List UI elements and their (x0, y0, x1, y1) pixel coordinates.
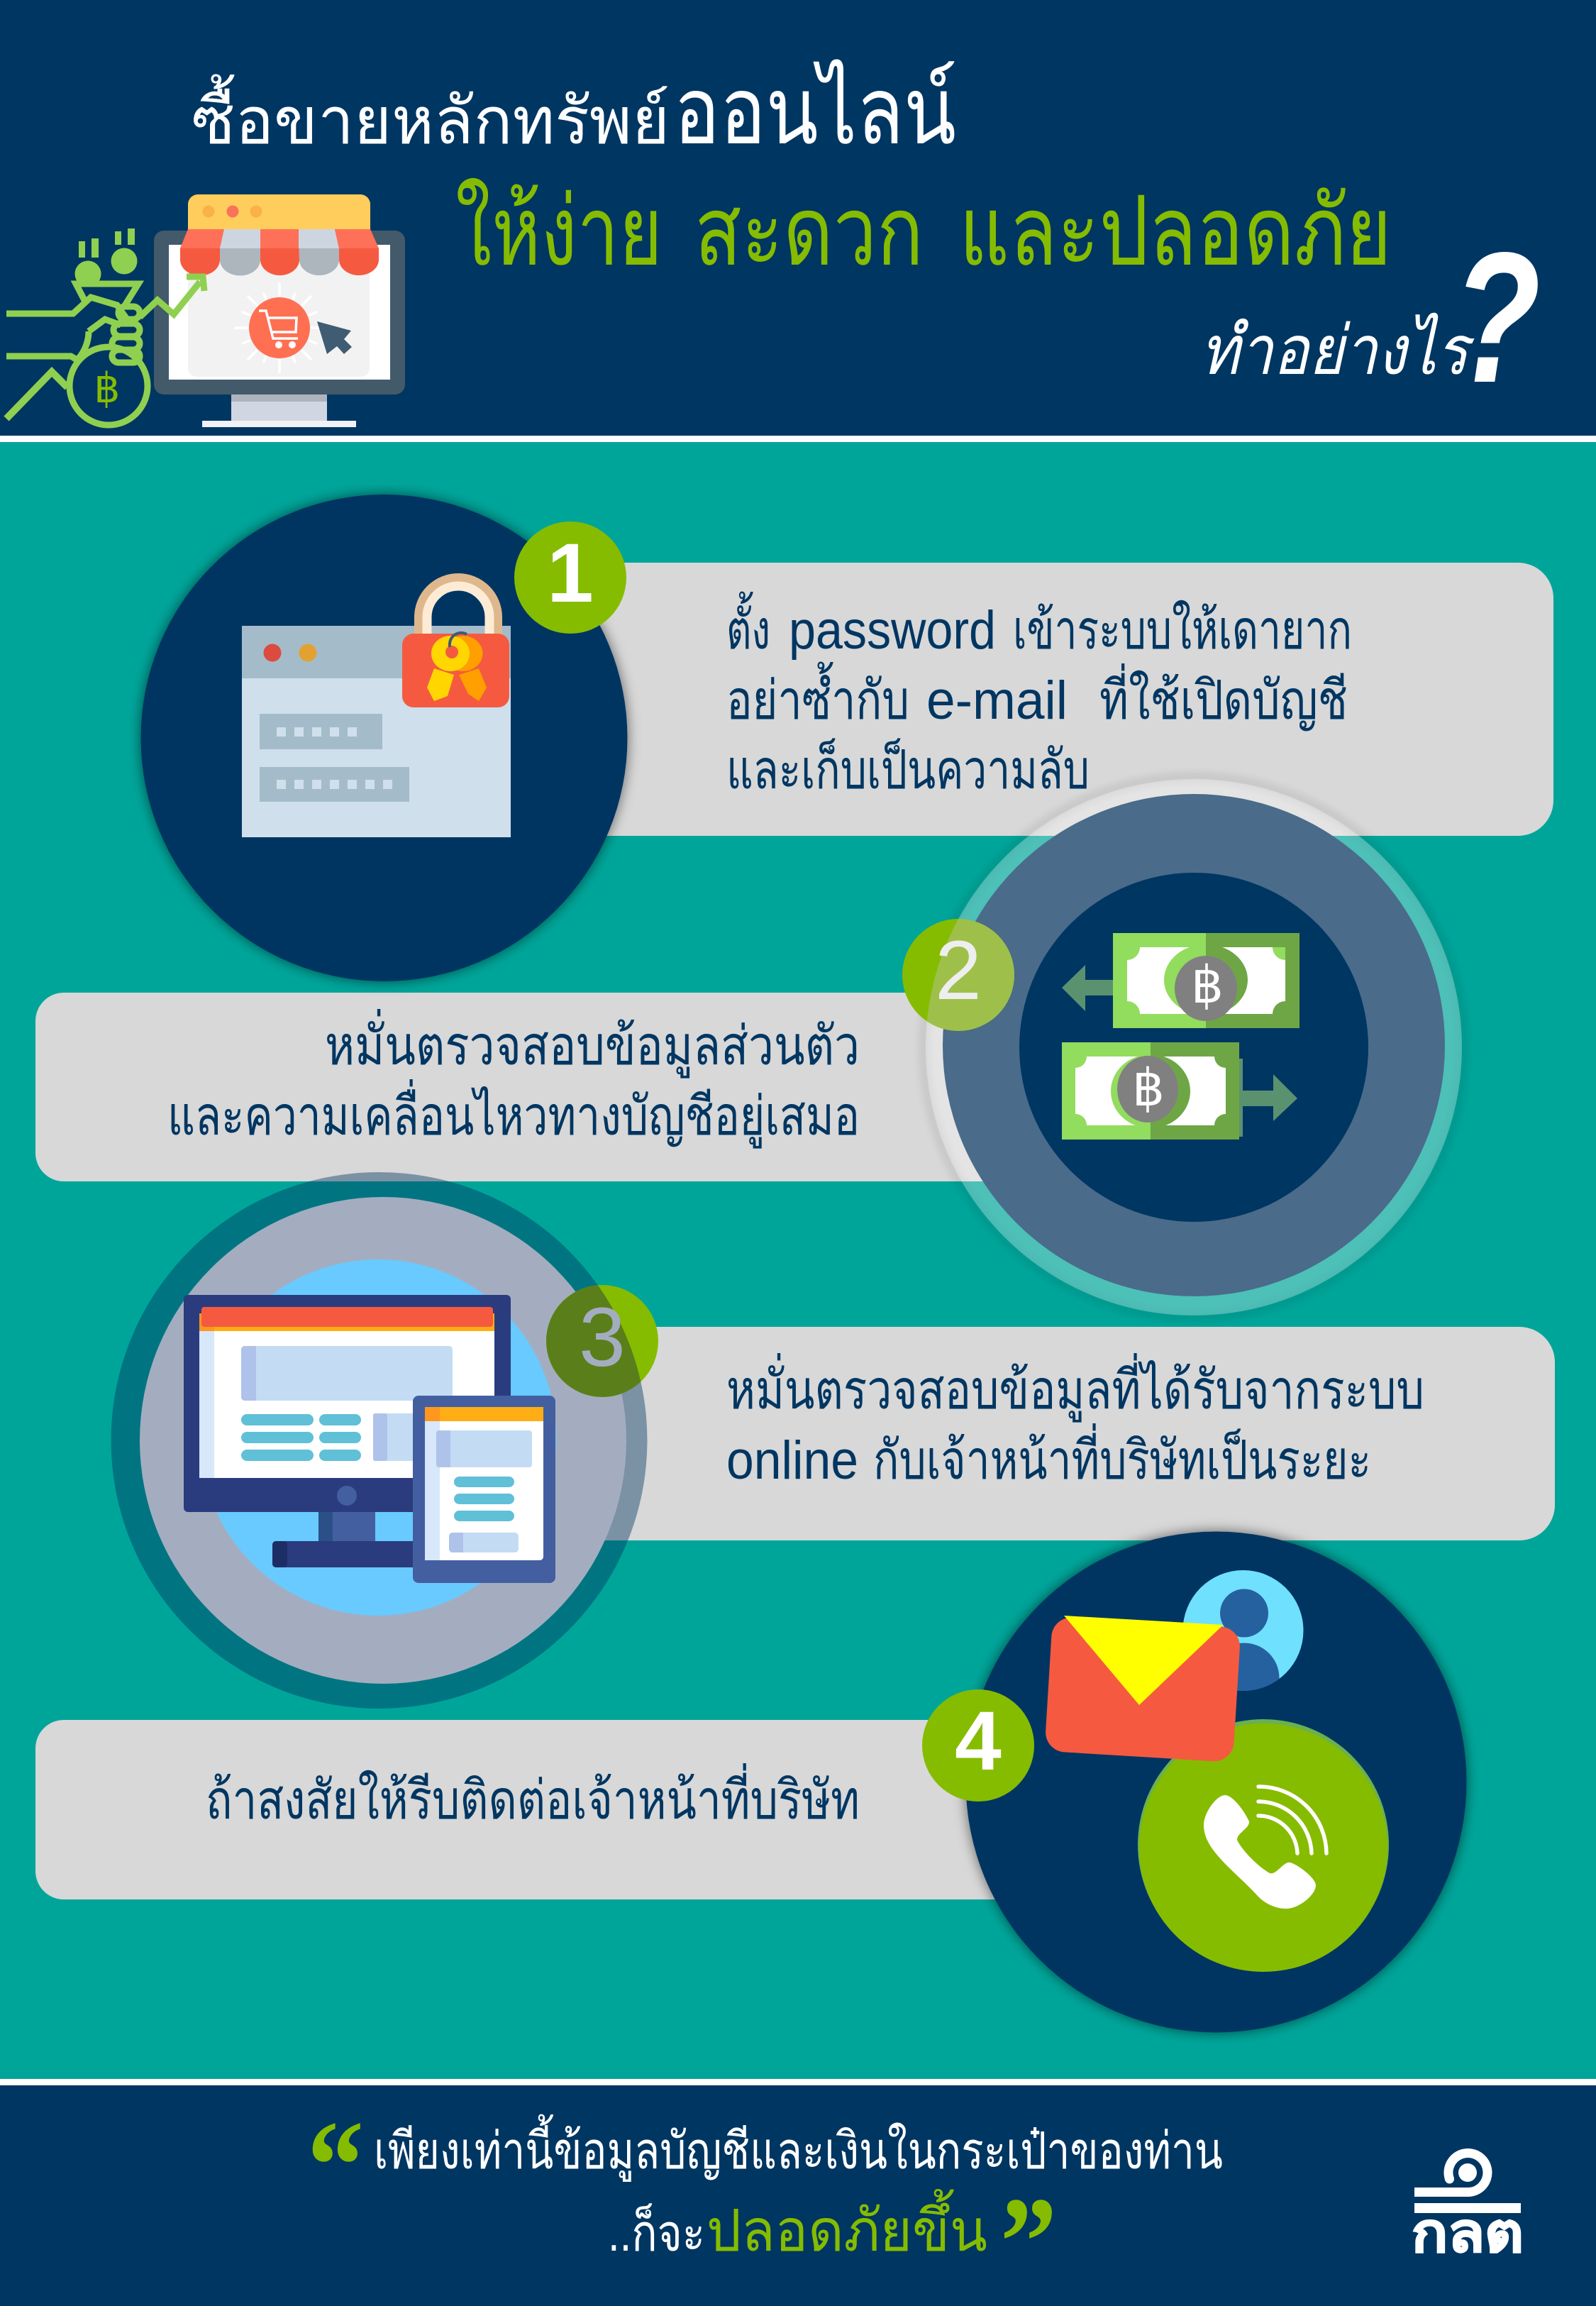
panel: step 3 circle (111, 1172, 647, 1709)
title line 1: ซื้อขายหลักทรัพย์ (192, 74, 670, 158)
icon: padlock with keys (402, 582, 509, 707)
panel: step 2 pill (35, 993, 1064, 1181)
title line 2: ให้ง่าย (455, 177, 663, 285)
panel: step 3 pill (497, 1327, 1555, 1540)
badge: number 2 (902, 919, 1014, 1031)
icon: upper banknote: ฿ (1191, 957, 1224, 1014)
logo: SEC (1412, 2153, 1524, 2263)
icon: login window (242, 626, 511, 837)
panel: step 1 pill (497, 563, 1553, 836)
footer line 2: ปลอดภัยขึ้น (706, 2189, 987, 2263)
icon: person avatar (1183, 1570, 1304, 1691)
panel: step 4 circle (966, 1531, 1467, 2032)
badge: number 4 (922, 1689, 1034, 1802)
badge: number 1 (514, 522, 626, 634)
text: step 3: หมั่นตรวจสอบข้อมูลที่ได้รับจากระบบ (726, 1353, 1424, 1423)
open quote: “ (307, 2095, 364, 2236)
title line 1 (192, 59, 956, 163)
badge: number 3: 3 (579, 1291, 626, 1384)
title line 1: ออนไลน์ (674, 59, 956, 163)
text: step 4: ถ้าสงสัยให้รีบติดต่อเจ้าหน้าที่บริษัท (206, 1763, 860, 1831)
text: step 1: และเก็บเป็นความลับ (726, 738, 1090, 800)
icon: hand with money bag (6, 228, 204, 425)
text: step 3: online (726, 1430, 858, 1491)
title line 2: และปลอดภัย (959, 177, 1392, 285)
footer line 1: เพียงเท่านี้ข้อมูลบัญชีและเงินในกระเป๋าของท่าน (374, 2114, 1223, 2182)
text: step 2 (167, 1009, 860, 1149)
text: step 2: หมั่นตรวจสอบข้อมูลส่วนตัว (325, 1009, 860, 1078)
icon: desktop monitor (184, 1295, 511, 1567)
title line 2 (455, 177, 1392, 285)
header band (0, 0, 1596, 442)
text: step 1: password (789, 600, 996, 661)
badge: number 2: 2 (935, 924, 982, 1017)
icon: tablet (413, 1396, 555, 1583)
icon: upper banknote (1062, 933, 1299, 1028)
text: step 1: อย่าซ้ำกับ (726, 661, 909, 731)
badge: number 4: 4 (955, 1694, 1002, 1788)
footer line 2 (608, 2189, 987, 2263)
text: step 1: เข้าระบบให้เดายาก (1013, 600, 1352, 661)
icon: envelope (1044, 1616, 1241, 1762)
icon: shop monitor (154, 194, 405, 427)
logo: SEC: กลต (1412, 2203, 1524, 2263)
panel: step 2 circle (924, 777, 1464, 1318)
icon: hand with money bag: ฿ (94, 365, 120, 412)
icon: lower banknote (1062, 1042, 1297, 1140)
text: step 2: และความเคลื่อนไหวทางบัญชีอยู่เสมอ (167, 1079, 860, 1149)
text: step 1: ที่ใช้เปิดบัญชี (1099, 663, 1348, 731)
text: step 3 (726, 1353, 1424, 1491)
title line 2: สะดวก (694, 177, 924, 285)
text: step 3: กับเจ้าหน้าที่บริษัทเป็นระยะ (873, 1423, 1371, 1491)
icon: phone circle (1138, 1719, 1389, 1972)
title line 3: ทำอย่างไร (1200, 312, 1475, 389)
icon: mouse cursor (317, 321, 352, 354)
text: step 1 (726, 591, 1352, 800)
badge: number 1: 1 (547, 526, 594, 620)
icon: lower banknote: ฿ (1132, 1060, 1165, 1117)
footer band (0, 2079, 1596, 2306)
panel: step 4 pill (35, 1720, 1064, 1899)
badge: number 3 (546, 1285, 658, 1397)
text: step 1: ตั้ง (726, 591, 770, 661)
text: step 1: e-mail (926, 671, 1068, 731)
icon: cart with rays (235, 284, 323, 372)
footer line 2: ..ก็จะ (608, 2203, 705, 2262)
panel: step 1 circle (140, 495, 627, 981)
question mark: ? (1453, 214, 1541, 421)
